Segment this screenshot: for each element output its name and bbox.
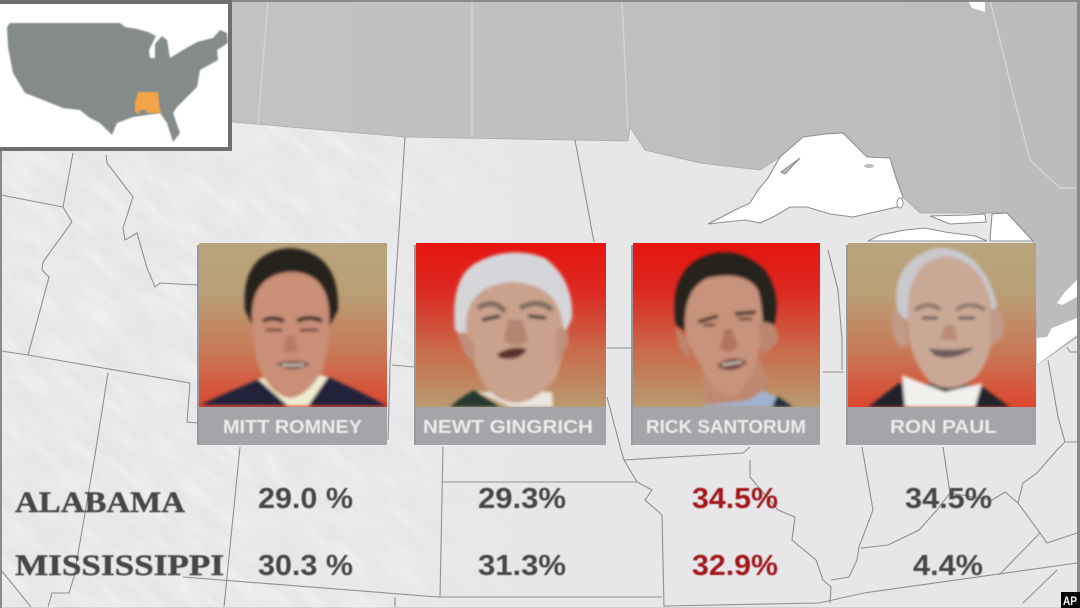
- Santorum result: 34.5%: [692, 483, 778, 515]
- name label: [416, 407, 606, 445]
- candidate card: Rick Santorum: [631, 243, 820, 445]
- name label: [199, 407, 387, 445]
- results row: Alabama: [15, 483, 992, 519]
- results row: Mississippi: [15, 549, 983, 582]
- portrait: Gingrich: [450, 252, 572, 407]
- name label: RON PAUL: [890, 417, 997, 437]
- Santorum result: 32.9%: [692, 550, 778, 582]
- Romney result: 29.0 %: [258, 483, 353, 515]
- state name: MISSISSIPPI: [15, 549, 224, 582]
- terrain relief: [12, 122, 394, 608]
- Romney result: 30.3 %: [258, 550, 353, 582]
- state borders: [1, 137, 1077, 607]
- candidate card: Newt Gingrich: [414, 243, 606, 445]
- portrait: Romney: [200, 248, 387, 406]
- name label: NEWT GINGRICH: [423, 417, 593, 437]
- name label: [848, 407, 1036, 445]
- canada province borders: [258, 0, 1076, 188]
- candidate card: Mitt Romney: [197, 243, 387, 445]
- great lakes: [708, 1, 1077, 365]
- Gingrich result: 31.3%: [478, 550, 566, 582]
- inset locator map: [0, 0, 232, 151]
- Paul result: 4.4%: [913, 550, 983, 582]
- portrait: Santorum: [674, 252, 793, 407]
- name label: RICK SANTORUM: [646, 417, 806, 437]
- lake islands: [781, 158, 903, 208]
- Gingrich result: 29.3%: [478, 483, 566, 515]
- name label: MITT ROMNEY: [223, 417, 362, 437]
- portrait: Paul: [868, 248, 1010, 407]
- AP credit logo: AP: [1063, 594, 1077, 608]
- contiguous US silhouette: [7, 23, 228, 142]
- name label: [633, 407, 820, 445]
- candidate card: Ron Paul: [846, 243, 1036, 445]
- us land: [0, 122, 1080, 608]
- highlighted states: Alabama and Mississippi: [135, 92, 162, 114]
- Paul result: 34.5%: [905, 483, 992, 515]
- state name: ALABAMA: [15, 486, 185, 519]
